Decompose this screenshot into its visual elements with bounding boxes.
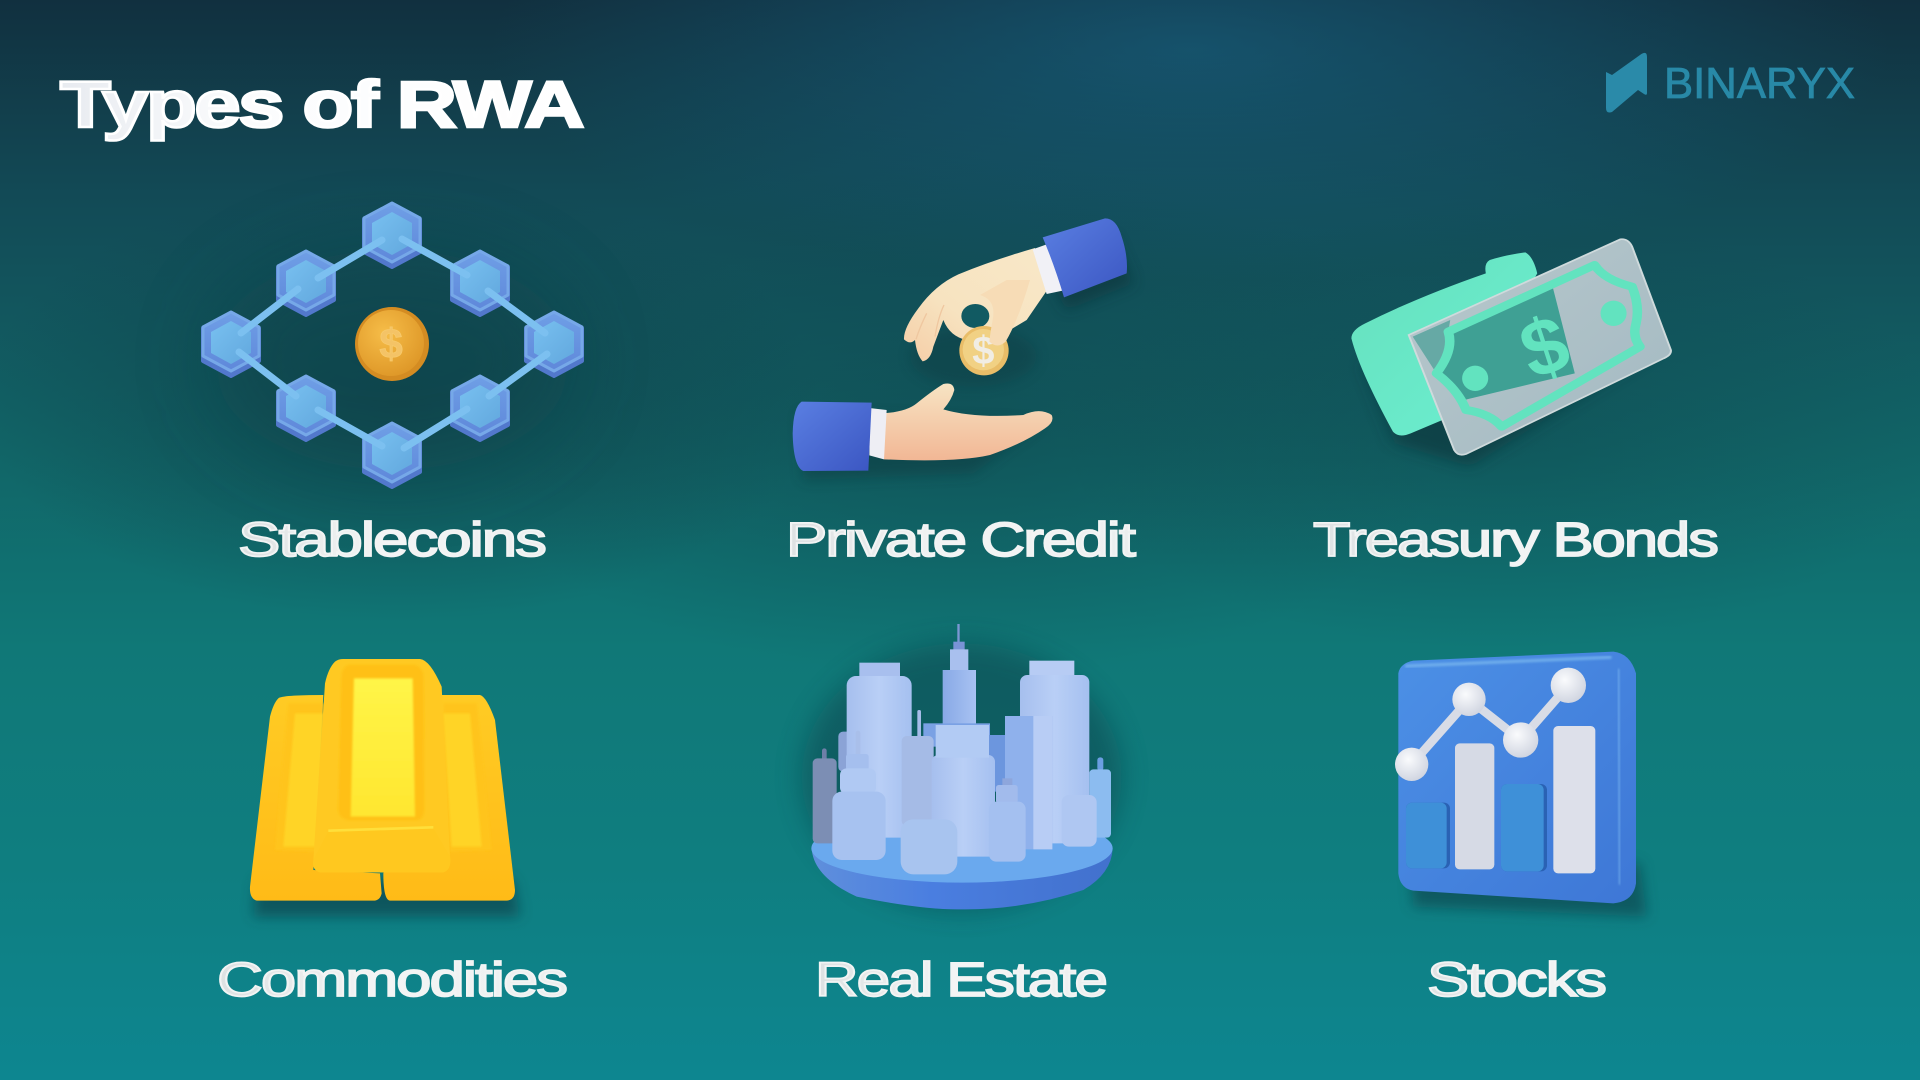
- coin: $: [972, 329, 994, 373]
- coin: $: [379, 320, 403, 367]
- icon: stock chart board: [1395, 652, 1647, 917]
- board: [1398, 652, 1636, 903]
- label: Commodities: Commodities: [217, 954, 567, 1007]
- icon: hands passing a coin: [793, 218, 1133, 480]
- bars: [1406, 726, 1595, 873]
- icon: Binaryx mark: [1606, 53, 1647, 112]
- logo: Binaryx: [1606, 53, 1855, 112]
- right bar: [383, 695, 515, 901]
- panel: Stocks: [1395, 652, 1647, 1007]
- disc: [812, 848, 1113, 909]
- panel: Treasury Bonds: [1313, 239, 1718, 567]
- icon: dollar banknotes: $: [1510, 298, 1579, 396]
- left bar: [250, 695, 382, 901]
- buildings: [813, 624, 1111, 874]
- label: Treasury Bonds: Treasury Bonds: [1313, 514, 1718, 567]
- lower hand: [793, 383, 1052, 471]
- label: Private Credit: Private Credit: [786, 514, 1136, 567]
- icon: city on a disc: [802, 624, 1122, 910]
- label: Stablecoins: Stablecoins: [238, 514, 546, 567]
- icon: blockchain ring with coin: [203, 203, 582, 487]
- trend line: [1395, 668, 1586, 781]
- panel: Private Credit: [786, 218, 1136, 567]
- label: Real Estate: Real Estate: [815, 954, 1106, 1007]
- coin: [959, 326, 1009, 375]
- centre bar: [313, 659, 450, 872]
- icon: dollar banknotes: [1351, 239, 1671, 467]
- panel: Stablecoins: [203, 203, 582, 567]
- upper hand: [904, 218, 1127, 375]
- panel: Commodities: [217, 659, 567, 1007]
- title: Types of RWA: [60, 67, 582, 141]
- wordmark: BINARYX: [1664, 59, 1855, 108]
- panel: Real Estate: [802, 624, 1122, 1007]
- icon: gold bars: [250, 659, 520, 917]
- back note: [1351, 252, 1537, 435]
- label: Stocks: Stocks: [1427, 954, 1606, 1007]
- coin: [355, 307, 429, 381]
- glass note: [1409, 239, 1671, 455]
